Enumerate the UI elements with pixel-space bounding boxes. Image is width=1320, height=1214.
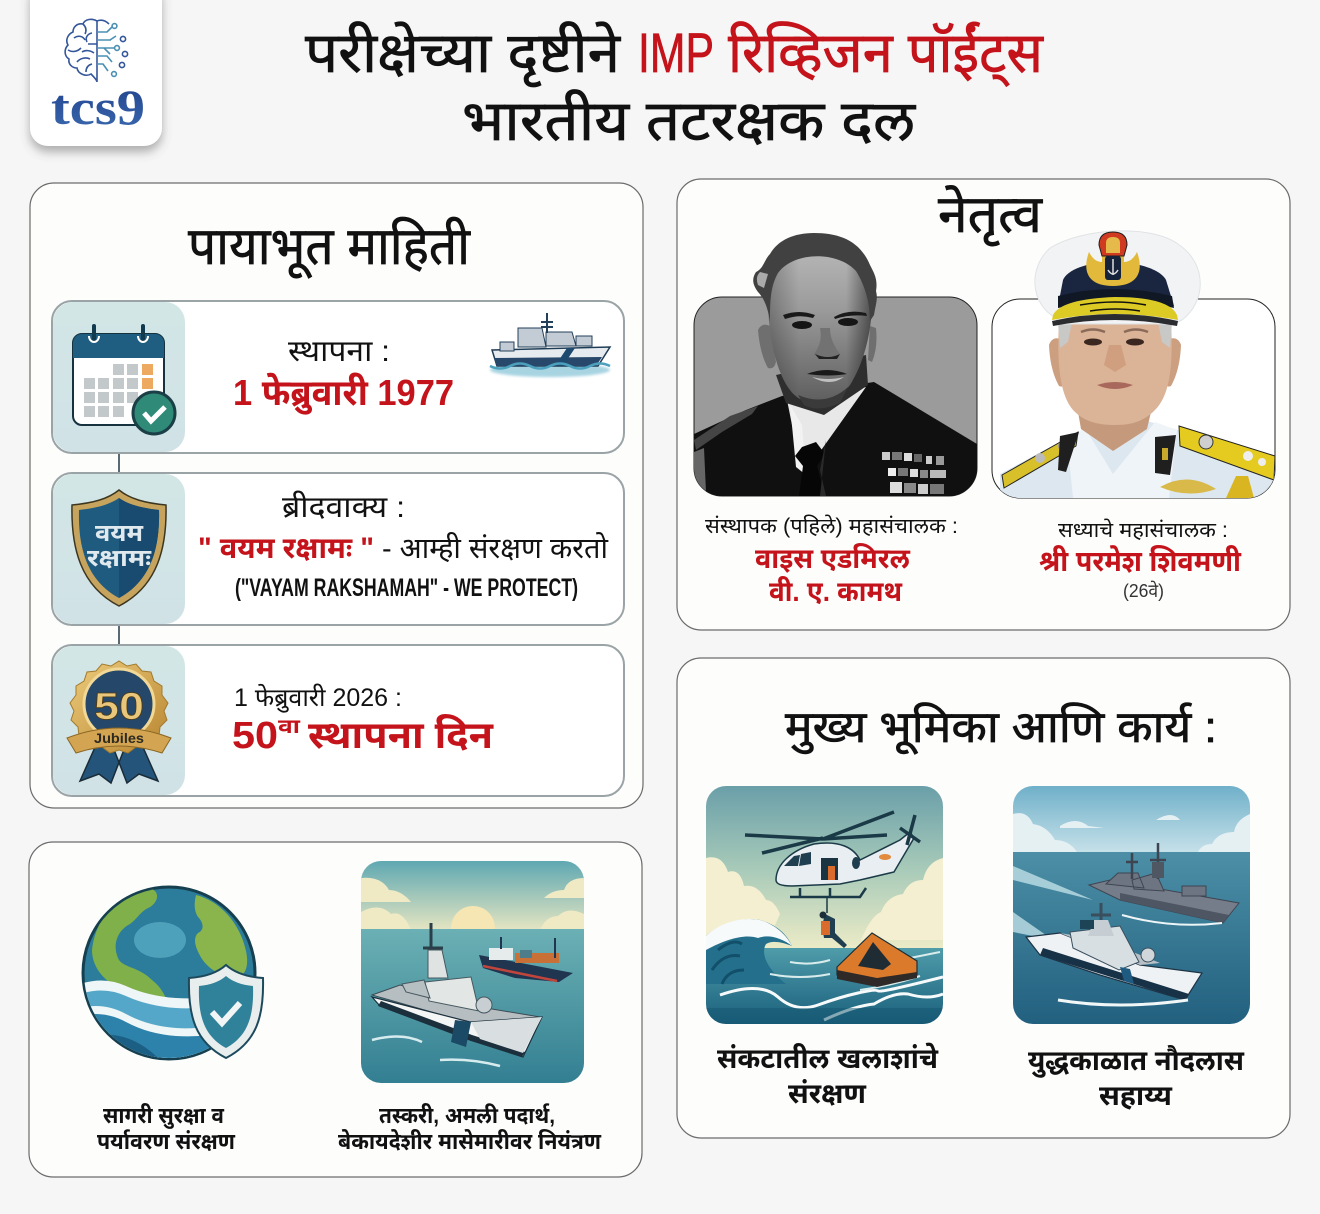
icon: calendar bbox=[73, 326, 175, 434]
text: motto: - आम्ही संरक्षण करतो bbox=[382, 532, 608, 565]
title: भारतीय तटरक्षक दल bbox=[462, 89, 916, 152]
photo: founding director general bbox=[694, 233, 977, 504]
text: motto: ("VAYAM RAKSHAMAH" - WE PROTECT) bbox=[235, 574, 578, 602]
text: foundation day: स्थापना दिन bbox=[308, 713, 494, 757]
officer head bbox=[1049, 322, 1181, 451]
text: motto: " वयम रक्षामः " bbox=[198, 532, 374, 565]
text: current director general: सध्याचे महासंचालक : bbox=[1058, 518, 1228, 542]
icon: naval cap bbox=[1035, 231, 1200, 326]
text: protection of sailors: संरक्षण bbox=[788, 1078, 866, 1109]
photo: current director general bbox=[992, 231, 1275, 498]
panel: basic information bbox=[30, 183, 643, 808]
text: maritime security: सागरी सुरक्षा व bbox=[103, 1103, 225, 1129]
illustration: naval support bbox=[1013, 786, 1250, 1024]
logo wordmark: tcs9 bbox=[51, 79, 145, 135]
icon: jubilee badge: Jubiles bbox=[94, 730, 144, 746]
text: founding director general bbox=[705, 514, 958, 607]
logo card bbox=[30, 0, 162, 146]
text: smuggling control: बेकायदेशीर मासेमारीवर नियंत्रण bbox=[338, 1129, 602, 1154]
text: founding director general: संस्थापक (पहिले) महासंचालक : bbox=[705, 514, 958, 538]
text: wartime navy support: सहाय्य bbox=[1099, 1080, 1173, 1111]
text: wartime navy support: युद्धकाळात नौदलास bbox=[1028, 1044, 1245, 1078]
text: foundation day bbox=[232, 682, 494, 757]
text: motto: ब्रीदवाक्य : bbox=[282, 490, 405, 524]
text: wartime navy support bbox=[1028, 1044, 1245, 1111]
text: current director general: (26वे) bbox=[1123, 580, 1164, 601]
text: protection of sailors bbox=[717, 1041, 939, 1109]
text: motto bbox=[198, 490, 608, 602]
heading: basic information: पायाभूत माहिती bbox=[188, 218, 471, 279]
icon: jubilee badge: 50 bbox=[94, 686, 144, 728]
illustration: coast guard patrol bbox=[361, 861, 584, 1083]
text: maritime security: पर्यावरण संरक्षण bbox=[97, 1129, 236, 1154]
text: protection of sailors: संकटातील खलाशांचे bbox=[717, 1041, 939, 1074]
title bbox=[305, 21, 1044, 152]
card: 50th foundation day bbox=[52, 645, 624, 796]
card: establishment bbox=[52, 301, 624, 453]
text: foundation day: 50 bbox=[232, 715, 278, 757]
icon: motto shield: रक्षामः bbox=[87, 545, 152, 572]
illustration: helicopter rescue bbox=[706, 786, 943, 1024]
icon: jubilee badge bbox=[67, 661, 171, 783]
text: current director general bbox=[1039, 518, 1241, 601]
heading: leadership: नेतृत्व bbox=[938, 185, 1043, 246]
icon: globe with shield bbox=[80, 887, 263, 1070]
panel: main roles and functions bbox=[677, 658, 1290, 1138]
text: smuggling control: तस्करी, अमली पदार्थ, bbox=[379, 1103, 555, 1128]
text: establishment date: स्थापना : bbox=[288, 335, 390, 368]
founder head bbox=[753, 233, 877, 415]
text: foundation day: 1 फेब्रुवारी 2026 : bbox=[234, 682, 402, 713]
text: founding director general: वाइस एडमिरल bbox=[755, 542, 911, 574]
title: परीक्षेच्या दृष्टीने bbox=[305, 21, 621, 88]
icon: motto shield bbox=[72, 490, 166, 606]
card: motto bbox=[52, 473, 624, 625]
icon: coast guard ship bbox=[490, 313, 610, 377]
title: IMP bbox=[638, 21, 714, 84]
helicopter bbox=[745, 812, 894, 853]
icon: brain circuit bbox=[65, 19, 128, 82]
text: establishment date bbox=[233, 335, 454, 415]
text: establishment date: 1 फेब्रुवारी 1977 bbox=[233, 371, 454, 415]
panel: maritime security bbox=[29, 842, 642, 1177]
title: रिव्हिजन पॉईंट्स bbox=[728, 21, 1044, 88]
heading: main roles: मुख्य भूमिका आणि कार्य : bbox=[785, 702, 1217, 755]
text: founding director general: वी. ए. कामथ bbox=[769, 575, 903, 607]
text: smuggling control bbox=[338, 1103, 602, 1154]
text: foundation day: वा bbox=[278, 716, 301, 738]
icon: motto shield: वयम bbox=[95, 520, 143, 547]
panel: leadership bbox=[677, 179, 1290, 630]
text: current director general: श्री परमेश शिवमणी bbox=[1039, 544, 1241, 578]
text: maritime security bbox=[97, 1103, 236, 1154]
